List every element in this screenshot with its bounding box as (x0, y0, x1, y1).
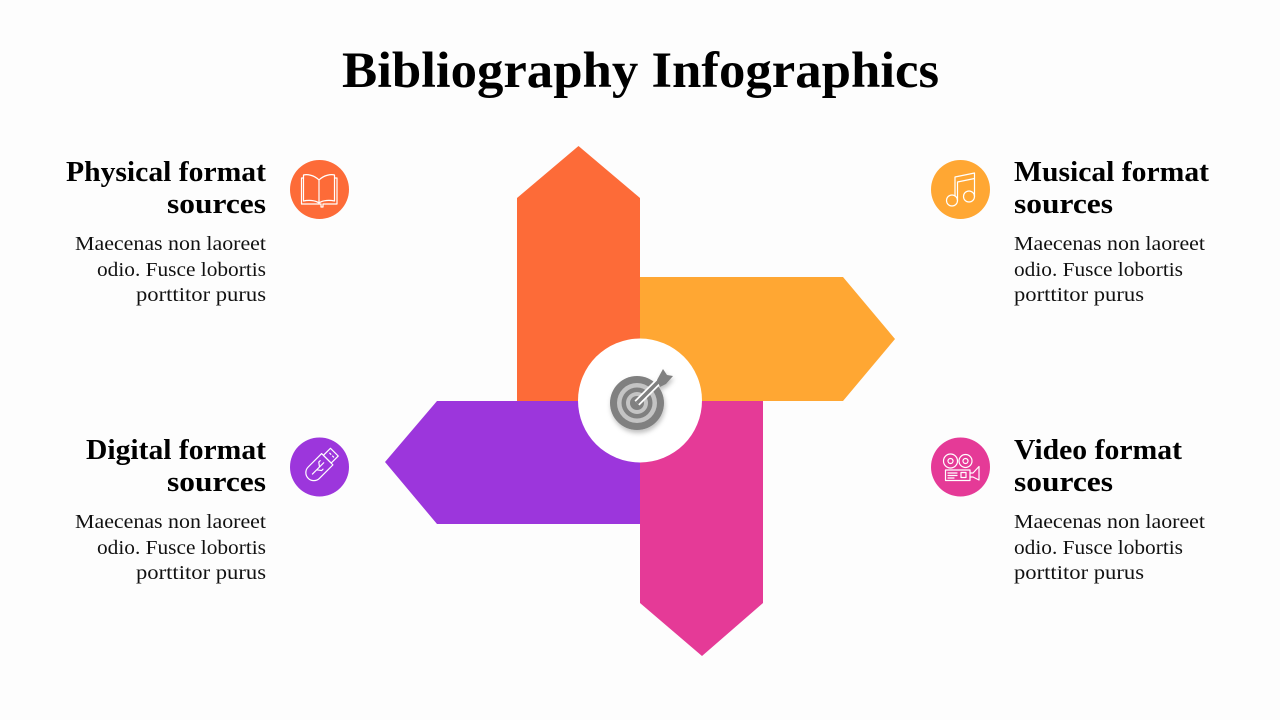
icon: target with arrow (610, 369, 673, 430)
title: Bibliography Infographics (342, 43, 939, 99)
arrow: orange pointing up (517, 146, 640, 401)
text block: musical: Maecenas non laoreet (1014, 233, 1205, 255)
heading: musical: Musical format (1014, 157, 1210, 188)
text block: video: odio. Fusce lobortis (1014, 537, 1183, 559)
panel: digital format sources (75, 435, 349, 584)
text block: physical: odio. Fusce lobortis (97, 259, 266, 281)
text block: digital: porttitor purus (136, 562, 266, 584)
center white circle (578, 338, 702, 462)
heading: digital (86, 435, 267, 498)
heading: video: Video format (1014, 435, 1183, 466)
icon: film camera (931, 438, 990, 496)
text block: physical: porttitor purus (136, 284, 266, 306)
text block: digital (75, 511, 266, 584)
heading: musical: sources (1014, 189, 1113, 220)
heading: digital: Digital format (86, 435, 267, 466)
text block: video: porttitor purus (1014, 562, 1144, 584)
panel: musical format sources (931, 157, 1210, 306)
text block: musical (1014, 233, 1205, 306)
icon: music notes (931, 160, 990, 219)
central pinwheel diagram (385, 146, 895, 656)
arrow: pink pointing down (640, 401, 763, 656)
arrow: yellow pointing right (640, 277, 895, 401)
panel: physical format sources (66, 157, 349, 306)
text block: physical (75, 233, 266, 306)
text block: video (1014, 511, 1205, 584)
icon: usb drive (290, 438, 349, 496)
text block: digital: odio. Fusce lobortis (97, 537, 266, 559)
text block: video: Maecenas non laoreet (1014, 511, 1205, 533)
heading: digital: sources (167, 467, 266, 498)
text block: digital: Maecenas non laoreet (75, 511, 266, 533)
heading: physical: Physical format (66, 157, 267, 188)
panel: video format sources (931, 435, 1205, 584)
icon: book (290, 160, 349, 219)
heading: video: sources (1014, 467, 1113, 498)
arrow: purple pointing left (385, 401, 640, 524)
text block: musical: porttitor purus (1014, 284, 1144, 306)
heading: physical (66, 157, 267, 220)
heading: video (1014, 435, 1183, 498)
text block: physical: Maecenas non laoreet (75, 233, 266, 255)
text block: musical: odio. Fusce lobortis (1014, 259, 1183, 281)
heading: musical (1014, 157, 1210, 220)
heading: physical: sources (167, 189, 266, 220)
